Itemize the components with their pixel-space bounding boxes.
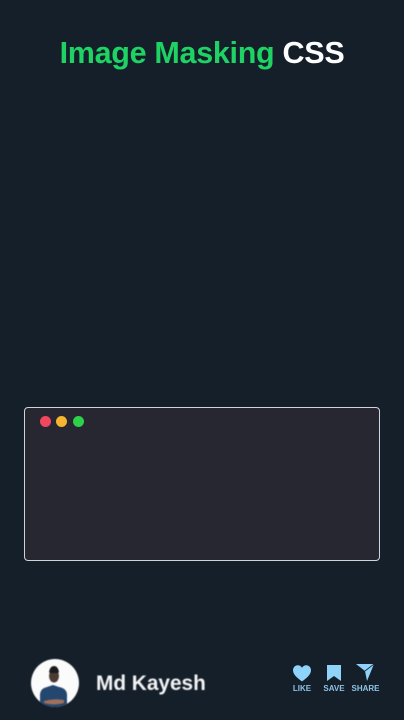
icon: author avatar — [30, 658, 80, 708]
save label: SAVE — [323, 684, 345, 693]
icon: red window dot — [40, 416, 51, 427]
panel: code window — [24, 407, 380, 560]
icon: bookmark — [327, 665, 341, 681]
icon: heart — [293, 665, 311, 682]
action: save — [323, 665, 345, 693]
icon: paper plane — [356, 664, 374, 681]
author name: Md Kayesh — [96, 672, 206, 695]
icon: yellow window dot — [56, 416, 67, 427]
action: like — [293, 665, 311, 693]
action: share — [351, 664, 380, 693]
share label: SHARE — [351, 684, 380, 693]
icon: green window dot — [73, 416, 84, 427]
like label: LIKE — [293, 684, 311, 693]
title: Image Masking CSS — [60, 36, 344, 70]
